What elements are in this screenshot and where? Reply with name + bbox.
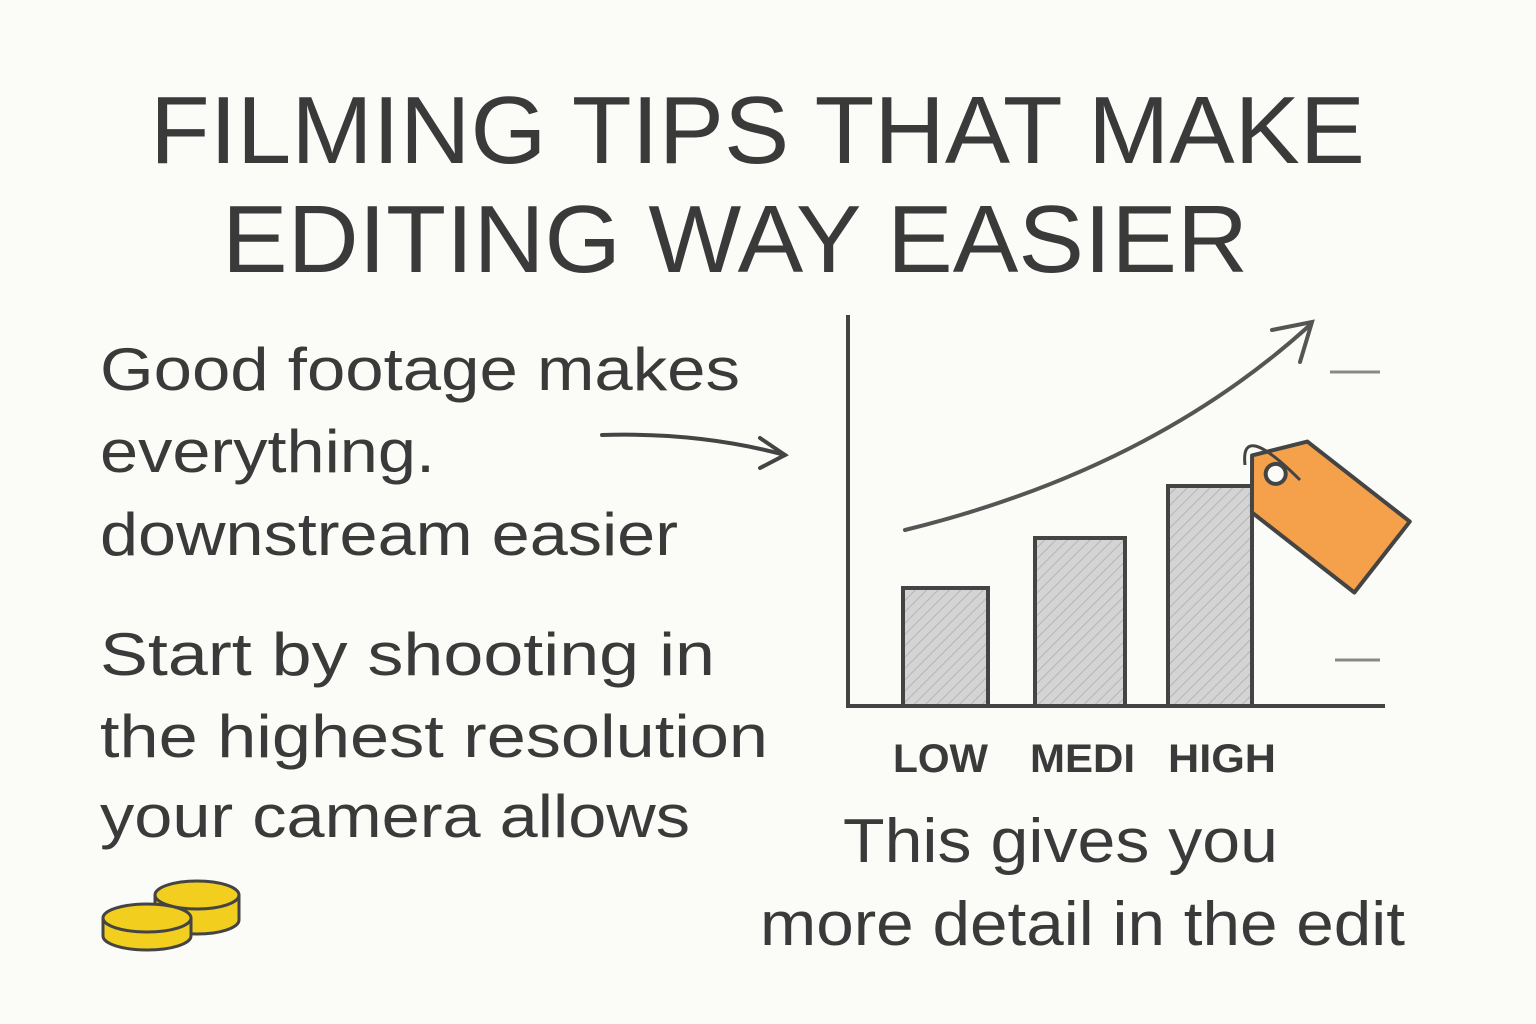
icon: price tag xyxy=(1224,420,1410,592)
text block: caption: This gives you xyxy=(843,807,1278,876)
bar: low xyxy=(903,588,988,706)
title: FILMING TIPS THAT MAKE xyxy=(150,77,1365,184)
text block: caption: more detail in the edit xyxy=(760,890,1405,959)
axis labels: LOW xyxy=(893,737,988,781)
text block: good footage: everything. xyxy=(100,418,435,485)
text block: caption xyxy=(760,807,1405,959)
text block: good footage xyxy=(100,336,740,568)
bar: medium xyxy=(1035,538,1125,706)
arrow: growth curve xyxy=(905,322,1312,530)
arrow: to chart xyxy=(602,435,785,468)
title xyxy=(150,77,1365,293)
text block: start by shooting: Start by shooting in xyxy=(100,621,715,688)
axis labels: MEDI xyxy=(1030,737,1135,781)
axis labels: HIGH xyxy=(1168,737,1276,781)
text block: good footage: downstream easier xyxy=(100,501,678,568)
text block: start by shooting: your camera allows xyxy=(100,783,690,850)
title: EDITING WAY EASIER xyxy=(222,186,1248,293)
icon: coins xyxy=(103,881,239,950)
text block: start by shooting xyxy=(100,621,768,850)
bar chart xyxy=(846,315,1385,706)
bar: high xyxy=(1168,486,1252,706)
text block: good footage: Good footage makes xyxy=(100,336,740,403)
axis labels xyxy=(893,737,1276,781)
text block: start by shooting: the highest resolution xyxy=(100,703,768,770)
